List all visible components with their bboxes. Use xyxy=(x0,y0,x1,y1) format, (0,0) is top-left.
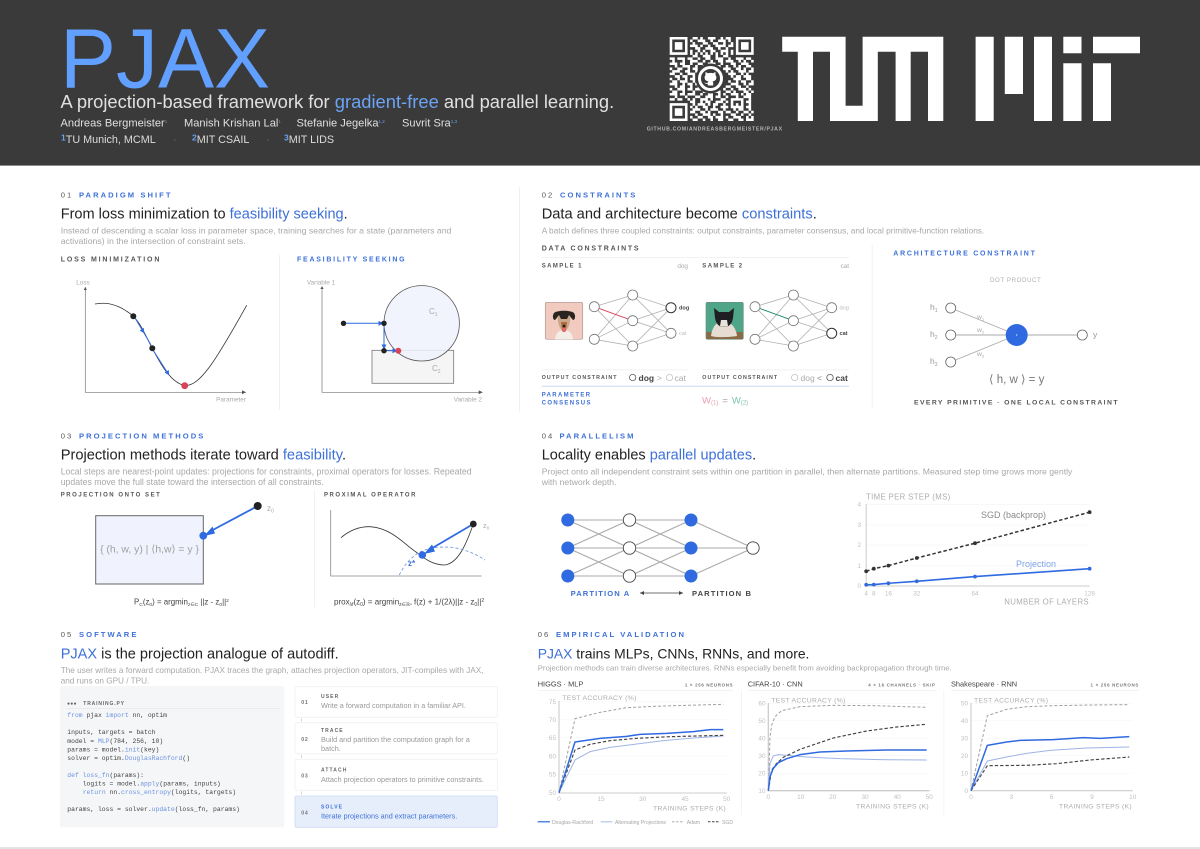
chart: time per step: 8 xyxy=(872,590,876,598)
chart: time per step: 0 xyxy=(857,583,861,590)
formula: proximal: λf xyxy=(350,602,354,608)
output constraint 2: < xyxy=(817,373,822,383)
code panel: def loss_fn(params): xyxy=(67,772,144,779)
label: feasibility seeking: FEASIBILITY SEEKING xyxy=(297,256,406,264)
sample 2 network: dog xyxy=(840,306,849,312)
chart: time per step xyxy=(857,492,1095,606)
formula: W1 = W2: (2) xyxy=(741,400,748,406)
heading 01: From loss minimization to feasibility seeking. xyxy=(61,206,348,222)
chart: time per step: 4 xyxy=(864,590,868,598)
chart: time per step: NUMBER OF LAYERS xyxy=(1004,598,1089,606)
chart: HIGGS MLP: HIGGS · MLP xyxy=(538,680,583,688)
chart: time per step: 64 xyxy=(971,590,979,598)
authors: 1 xyxy=(165,119,168,124)
code panel: ●●● xyxy=(67,701,77,707)
chart: HIGGS MLP: 75 xyxy=(549,699,556,706)
panel: 04 parallelism xyxy=(541,432,1095,606)
subtitle: A projection-based framework for gradient-free and parallel learning. xyxy=(60,91,614,112)
panel: 03 projection methods xyxy=(61,432,490,608)
description 04: Project onto all independent constraint sets within one partition in parallel, then alternate partitions. Measured step time grows more gently xyxy=(542,466,1073,476)
chart: CIFAR-10 CNN: 30 xyxy=(758,753,766,760)
formula: projection: ||z - z xyxy=(198,598,219,606)
step 03 attach: Attach projection operators to primitive constraints. xyxy=(321,775,484,784)
chart: Shakespeare RNN: 50 xyxy=(961,700,968,708)
chart: loss curve: Loss xyxy=(76,280,90,286)
chart: HIGGS MLP: 15 xyxy=(597,796,605,803)
step 02 trace: Build and partition the computation graph for a xyxy=(321,735,471,744)
label: projection onto set: PROJECTION ONTO SET xyxy=(61,492,161,498)
image: dog photo xyxy=(545,302,583,339)
label: dot product: DOT PRODUCT xyxy=(990,277,1041,284)
chart: HIGGS MLP: 45 xyxy=(681,796,689,803)
chart: feasibility sets: C xyxy=(429,307,435,316)
formula: proximal: 2 xyxy=(481,598,484,604)
diagram: dot product node: h xyxy=(930,356,935,366)
output constraint 2: cat xyxy=(836,373,848,383)
chart: CIFAR-10 CNN: 10 xyxy=(797,794,805,801)
chart: Shakespeare RNN: 6 xyxy=(1050,794,1054,801)
step 01 user: Write a forward computation in a familiar API. xyxy=(321,701,466,710)
partition labels xyxy=(571,589,752,598)
label: architecture constraint: ARCHITECTURE CONSTRAINT xyxy=(893,250,1037,258)
chart: CIFAR-10 CNN: 60 xyxy=(758,700,766,708)
chart: Shakespeare RNN: 40 xyxy=(961,718,968,725)
chart: HIGGS MLP xyxy=(538,680,733,813)
chart: feasibility sets: Variable 2 xyxy=(454,396,482,404)
formula: W1 = W2: W xyxy=(732,396,741,406)
chart: time per step: 4 xyxy=(857,502,861,508)
section label 05: 05 xyxy=(61,630,73,639)
formula: projection: (z xyxy=(143,598,149,606)
chart: Shakespeare RNN: 10 xyxy=(1129,794,1137,801)
diagram: dot product node: w xyxy=(976,351,982,358)
chart: Shakespeare RNN: TEST ACCURACY (%) xyxy=(974,698,1048,704)
formula: projection: ) = argmin xyxy=(152,598,188,606)
affiliations: 2 xyxy=(192,132,197,142)
chart: CIFAR-10 CNN: TRAINING STEPS (K) xyxy=(856,804,929,811)
chart: Shakespeare RNN: 30 xyxy=(961,736,968,742)
label: proximal operator: PROXIMAL OPERATOR xyxy=(324,492,417,498)
diagram: projection onto set: z xyxy=(267,504,271,513)
formula: proximal: f(z) + 1/(2λ)||z - z xyxy=(412,598,474,606)
sample 1 network: dog xyxy=(679,306,690,312)
diagram: projection onto set: 0 xyxy=(271,508,274,514)
chart: CIFAR-10 CNN: 4 × 16 CHANNELS · SKIP xyxy=(868,682,936,687)
chart: Shakespeare RNN: 1 × 256 NEURONS xyxy=(1091,682,1139,687)
diagram: dot product node: 2 xyxy=(982,330,985,334)
chart: loss curve xyxy=(76,280,247,404)
chart: feasibility sets: C xyxy=(432,364,438,373)
formula: projection: 0 xyxy=(219,602,222,608)
output constraint 1: > xyxy=(657,373,662,383)
chart: HIGGS MLP: 55 xyxy=(549,772,556,779)
title: PJAX: PJAX xyxy=(60,12,270,106)
panel: 02 constraints xyxy=(542,191,984,406)
sample 1 network: dog xyxy=(677,263,688,270)
chart: HIGGS MLP: 60 xyxy=(549,753,556,760)
QR caption: GITHUB.COM/ANDREASBERGMEISTER/PJAX xyxy=(647,127,783,133)
diagram: dot product node: 3 xyxy=(982,354,985,358)
chart legend: Alternating Projections xyxy=(615,820,666,826)
diagram: dot product node: h xyxy=(930,329,935,339)
diagram: proximal operator: z* xyxy=(408,559,416,568)
chart: Shakespeare RNN: 20 xyxy=(961,753,968,760)
affiliations: 3 xyxy=(284,132,289,142)
chart: time per step: 2 xyxy=(857,542,861,549)
diagram: dot product node: y xyxy=(1093,330,1098,340)
chart: feasibility sets xyxy=(307,280,483,404)
diagram: dot product node: 1 xyxy=(982,316,985,322)
formula: proximal: 0 xyxy=(360,602,363,608)
partition labels: PARTITION A xyxy=(571,589,630,598)
chart: HIGGS MLP: 30 xyxy=(639,796,647,803)
code panel: solver = optim.DouglasRachford() xyxy=(67,755,190,762)
chart: Shakespeare RNN: 3 xyxy=(1010,794,1014,801)
chart: time per step: TIME PER STEP (MS) xyxy=(866,492,951,502)
panel: 01 paradigm shift xyxy=(61,191,483,410)
section label 06: EMPIRICAL VALIDATION xyxy=(556,630,686,639)
code panel xyxy=(60,686,284,827)
formula: inner product: ⟨ h, w ⟩ = y xyxy=(989,374,1045,386)
sample 2 network: cat xyxy=(840,263,849,270)
step 04 solve: 04 xyxy=(301,810,308,816)
authors: Andreas Bergmeister xyxy=(60,118,165,130)
authors: Suvrit Sra xyxy=(402,118,452,130)
formula: proximal: (z xyxy=(353,598,360,606)
chart: HIGGS MLP: 1 × 256 NEURONS xyxy=(685,682,733,687)
step 01 user: USER xyxy=(321,694,339,700)
chart: time per step: 128 xyxy=(1084,590,1095,598)
chart: time per step: SGD (backprop) xyxy=(981,510,1046,520)
step 02 trace: batch. xyxy=(321,744,341,753)
partition labels: PARTITION B xyxy=(692,589,752,598)
chart: time per step: Projection xyxy=(1016,559,1056,569)
formula: projection: 2 xyxy=(226,598,229,604)
step 04 solve xyxy=(295,796,497,827)
output constraint 1: OUTPUT CONSTRAINT xyxy=(542,375,618,381)
step 04 solve: Iterate projections and extract parameters. xyxy=(321,812,457,820)
step 03 attach xyxy=(295,759,497,790)
description 03: Local steps are nearest-point updates: projections for constraints, proximal operators for losses. Repeated xyxy=(61,466,472,476)
section label 01: PARADIGM SHIFT xyxy=(79,191,173,200)
affiliations: MIT LIDS xyxy=(289,134,334,146)
diagram: dot product node: 1 xyxy=(935,308,938,314)
diagram: partition network xyxy=(561,514,759,582)
logo: MIT xyxy=(976,37,1140,121)
formula: projection: || xyxy=(222,598,226,606)
description 03: updates move the full state toward the intersection of all constraints. xyxy=(61,477,324,487)
sample 1 network xyxy=(542,263,690,351)
affiliations: TU Munich, MCML xyxy=(66,134,156,146)
authors: 1,2 xyxy=(379,119,385,124)
authors: 1 xyxy=(278,119,281,124)
step 03 attach: 03 xyxy=(301,774,308,780)
description 01: Instead of descending a scalar loss in parameter space, training searches for a state (parameters and xyxy=(61,226,452,236)
diagram: dot product node: 2 xyxy=(935,335,938,341)
formula: proximal: ) = argmin xyxy=(363,598,399,606)
section label 02: 02 xyxy=(542,191,554,200)
diagram: dot product node: 3 xyxy=(935,362,938,368)
chart legend xyxy=(538,820,733,826)
formula: W1 = W2: = xyxy=(722,396,728,406)
sample 2 network xyxy=(702,263,849,351)
diagram: dot product node: w xyxy=(976,314,982,321)
diagram: proximal operator xyxy=(331,510,490,576)
section label 04: 04 xyxy=(542,432,554,441)
affiliations: · xyxy=(173,134,177,146)
chart: CIFAR-10 CNN: 20 xyxy=(758,770,766,778)
chart: HIGGS MLP: 50 xyxy=(723,796,731,803)
chart: CIFAR-10 CNN: TEST ACCURACY (%) xyxy=(771,698,846,704)
formula: projection: P xyxy=(134,598,139,606)
code panel: logits = model.apply(params, inputs) xyxy=(83,780,221,788)
panel: architecture constraint xyxy=(893,250,1119,406)
chart: HIGGS MLP: TEST ACCURACY (%) xyxy=(562,695,637,702)
logo: TUM xyxy=(782,37,943,121)
affiliations: MIT CSAIL xyxy=(197,134,249,146)
authors: Stefanie Jegelka xyxy=(296,118,379,130)
chart: CIFAR-10 CNN: 50 xyxy=(758,718,766,725)
label: parameter consensus: PARAMETER xyxy=(542,392,591,398)
formula: W1 = W2: (1) xyxy=(711,400,718,406)
diagram: projection onto set: { (h, w, y) | ⟨h,w⟩ = y } xyxy=(100,544,199,556)
section label 03: PROJECTION METHODS xyxy=(79,432,205,441)
chart: Shakespeare RNN: 0 xyxy=(964,788,968,795)
code panel: params = model.init(key) xyxy=(67,746,159,753)
heading 05: PJAX is the projection analogue of autodiff. xyxy=(61,646,339,662)
output constraint 1: dog xyxy=(638,373,654,383)
authors: 1,3 xyxy=(451,119,457,124)
chart legend: Douglas-Rachford xyxy=(552,820,593,826)
chart: CIFAR-10 CNN: 20 xyxy=(829,794,837,801)
section label 05: SOFTWARE xyxy=(79,630,138,639)
step 02 trace: TRACE xyxy=(321,728,344,734)
description 04: with network depth. xyxy=(541,477,617,487)
description 05: and runs on GPU / TPU. xyxy=(61,676,149,686)
step 01 user: 01 xyxy=(301,700,308,706)
formula: projection: 0 xyxy=(149,602,152,608)
chart: loss curve: Parameter xyxy=(216,396,247,404)
step 01 user xyxy=(295,687,497,717)
sample 2 network: SAMPLE 2 xyxy=(702,264,744,270)
formula: W1 = W2: W xyxy=(702,396,711,406)
header band xyxy=(0,0,1200,166)
code panel: params, loss = solver.update(loss_fn, params) xyxy=(67,806,240,813)
heading 02: Data and architecture become constraints. xyxy=(542,206,817,222)
output constraint 1: cat xyxy=(674,373,686,383)
chart legend: Adam xyxy=(687,820,700,826)
chart: Shakespeare RNN: Shakespeare · RNN xyxy=(951,680,1017,688)
code panel: return nn.cross_entropy(logits, targets) xyxy=(83,789,236,796)
label: data constraints: DATA CONSTRAINTS xyxy=(542,246,640,252)
chart: time per step: 32 xyxy=(913,590,921,598)
chart legend: SGD xyxy=(722,820,733,826)
sample 1 network: cat xyxy=(679,331,687,337)
label: parameter consensus: CONSENSUS xyxy=(542,400,592,406)
heading 04: Locality enables parallel updates. xyxy=(542,448,756,464)
authors: Manish Krishan Lal xyxy=(184,118,278,130)
section label 01: 01 xyxy=(61,191,73,200)
description 01: activations) in the intersection of constraint sets. xyxy=(61,236,246,246)
step 02 trace xyxy=(295,723,497,754)
formula: proximal: 0 xyxy=(474,602,477,608)
image: cat photo xyxy=(706,302,743,339)
panel: 05 software xyxy=(60,630,497,827)
affiliations: 1 xyxy=(61,132,66,142)
code panel: TRAINING.PY xyxy=(83,701,125,707)
formula: proximal: || xyxy=(477,598,481,606)
code panel: inputs, targets = batch xyxy=(67,729,156,736)
chart: HIGGS MLP: 0 xyxy=(557,796,561,803)
chart: Shakespeare RNN xyxy=(951,680,1139,811)
heading 06: PJAX trains MLPs, CNNs, RNNs, and more. xyxy=(538,646,809,662)
heading 03: Projection methods iterate toward feasibility. xyxy=(61,448,346,464)
step 02 trace: 02 xyxy=(301,737,308,743)
label: loss minimization: LOSS MINIMIZATION xyxy=(61,256,161,264)
diagram: dot product node: h xyxy=(930,302,935,312)
description 05: The user writes a forward computation. PJAX traces the graph, attaches projection operators, JIT-compiles with JAX, xyxy=(61,666,483,675)
chart: time per step: 1 xyxy=(857,563,861,570)
chart: CIFAR-10 CNN: 30 xyxy=(861,794,869,801)
output constraint 1 xyxy=(542,373,686,383)
step 03 attach: ATTACH xyxy=(321,768,347,774)
chart: Shakespeare RNN: 0 xyxy=(969,794,973,801)
chart: feasibility sets: Variable 1 xyxy=(307,280,336,286)
formula: proximal: z∈ℝⁿ xyxy=(399,602,412,608)
chart: Shakespeare RNN: 9 xyxy=(1090,794,1094,801)
output constraint 2 xyxy=(702,373,848,383)
description 06: Projection methods can train diverse architectures. RNNs especially benefit from avoiding backpropagation through time. xyxy=(538,664,952,672)
output constraint 2: dog xyxy=(800,373,815,383)
code panel: from pjax import nn, optim xyxy=(67,712,167,719)
QR code xyxy=(670,38,754,120)
affiliations: · xyxy=(266,134,270,146)
chart: CIFAR-10 CNN: 10 xyxy=(758,788,766,795)
chart: time per step: 3 xyxy=(857,522,861,529)
section label 02: CONSTRAINTS xyxy=(560,191,637,200)
chart: CIFAR-10 CNN: 40 xyxy=(758,736,766,742)
chart: CIFAR-10 CNN: 50 xyxy=(926,794,933,801)
chart: HIGGS MLP: 50 xyxy=(549,790,556,797)
caption: every primitive: EVERY PRIMITIVE · ONE LOCAL CONSTRAINT xyxy=(914,400,1119,406)
chart: CIFAR-10 CNN: CIFAR-10 · CNN xyxy=(748,680,803,688)
description 02: A batch defines three coupled constraints: output constraints, parameter consensus, and local primitive-function relations. xyxy=(542,226,984,236)
sample 1 network: SAMPLE 1 xyxy=(542,264,583,270)
chart: Shakespeare RNN: 10 xyxy=(961,770,968,778)
sample 2 network: cat xyxy=(840,331,848,337)
chart: feasibility sets: 1 xyxy=(435,312,438,318)
chart: feasibility sets: 2 xyxy=(438,369,441,375)
diagram: dot product node xyxy=(930,302,1098,368)
formula: proximal: prox xyxy=(334,598,350,606)
code panel: model = MLP(784, 256, 10) xyxy=(67,738,163,745)
panel: 06 empirical validation xyxy=(538,630,1139,826)
diagram: dot product node: w xyxy=(976,327,982,334)
chart: CIFAR-10 CNN xyxy=(748,680,936,811)
section label 04: PARALLELISM xyxy=(560,432,635,441)
chart: HIGGS MLP: 65 xyxy=(549,735,556,742)
chart: Shakespeare RNN: TRAINING STEPS (K) xyxy=(1059,804,1132,811)
chart: HIGGS MLP: 70 xyxy=(549,717,556,724)
step 04 solve: SOLVE xyxy=(321,804,343,810)
diagram: proximal operator: z xyxy=(483,521,487,530)
output constraint 2: OUTPUT CONSTRAINT xyxy=(702,375,778,381)
formula: projection: z∈C xyxy=(188,602,199,608)
chart: time per step: 16 xyxy=(885,590,892,598)
chart: CIFAR-10 CNN: 40 xyxy=(894,794,901,801)
chart: HIGGS MLP: TRAINING STEPS (K) xyxy=(653,806,726,813)
diagram: proximal operator: 0 xyxy=(487,526,490,532)
section label 03: 03 xyxy=(61,432,73,441)
section label 06: 06 xyxy=(538,630,550,639)
formula: projection: C xyxy=(139,602,143,608)
diagram: projection onto set xyxy=(96,502,274,584)
chart: CIFAR-10 CNN: 0 xyxy=(767,794,771,801)
